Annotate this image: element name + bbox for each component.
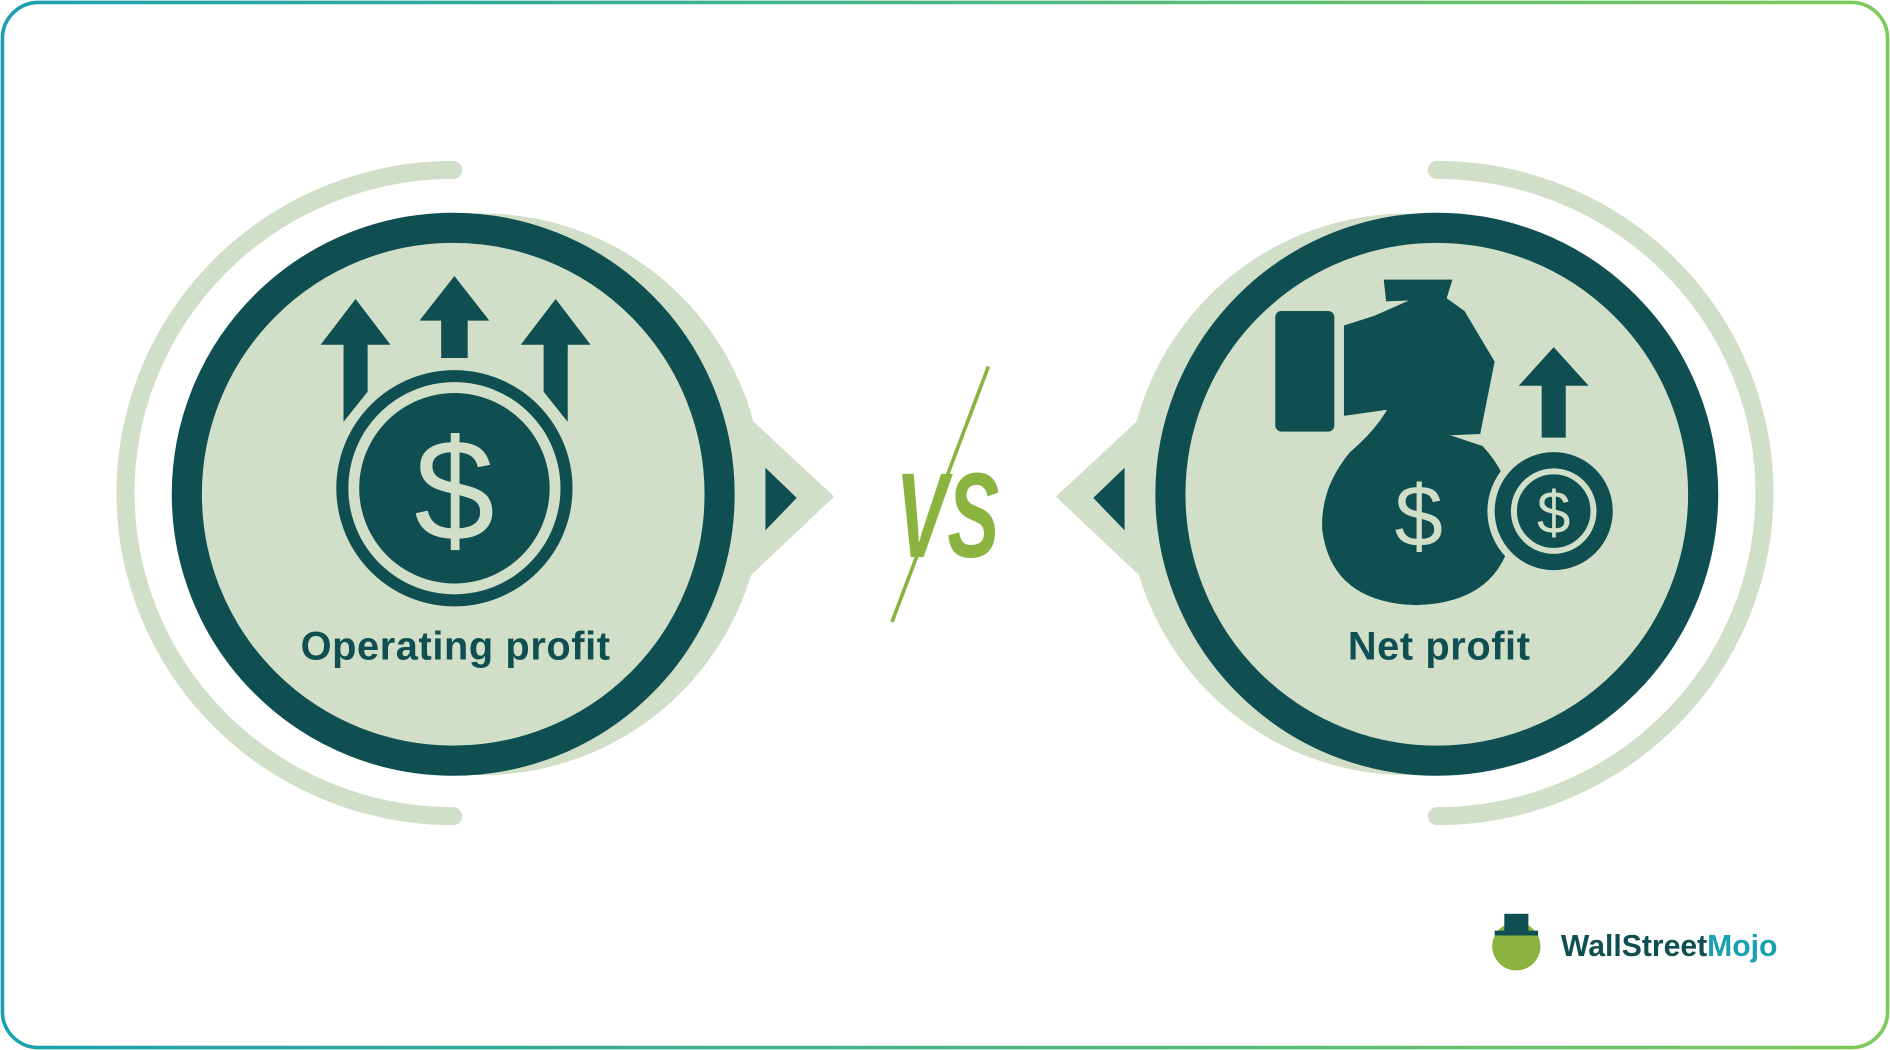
icon: hand with money bag bbox=[1275, 280, 1616, 605]
VS mark bbox=[892, 366, 999, 622]
outer arc right bbox=[1437, 170, 1764, 816]
label: operating profit: Operating profit bbox=[301, 624, 611, 668]
outer arc left bbox=[126, 170, 453, 816]
logo: WallStreetMojo: WallStreetMojo bbox=[1561, 930, 1777, 963]
shadow circle with pointer bbox=[1056, 213, 1689, 775]
VS mark: VS bbox=[896, 448, 999, 583]
panel: net profit bbox=[1056, 170, 1764, 816]
icon: coin with arrows: $ bbox=[414, 409, 495, 571]
icon: coin with arrows bbox=[321, 276, 591, 606]
shadow circle with pointer bbox=[201, 213, 834, 775]
logo: WallStreetMojo bbox=[1492, 914, 1777, 970]
icon: hand with money bag: $ bbox=[1395, 468, 1443, 565]
icon: hand with money bag: $ bbox=[1537, 478, 1570, 546]
panel: operating profit bbox=[126, 170, 834, 816]
label: net profit: Net profit bbox=[1348, 624, 1531, 668]
